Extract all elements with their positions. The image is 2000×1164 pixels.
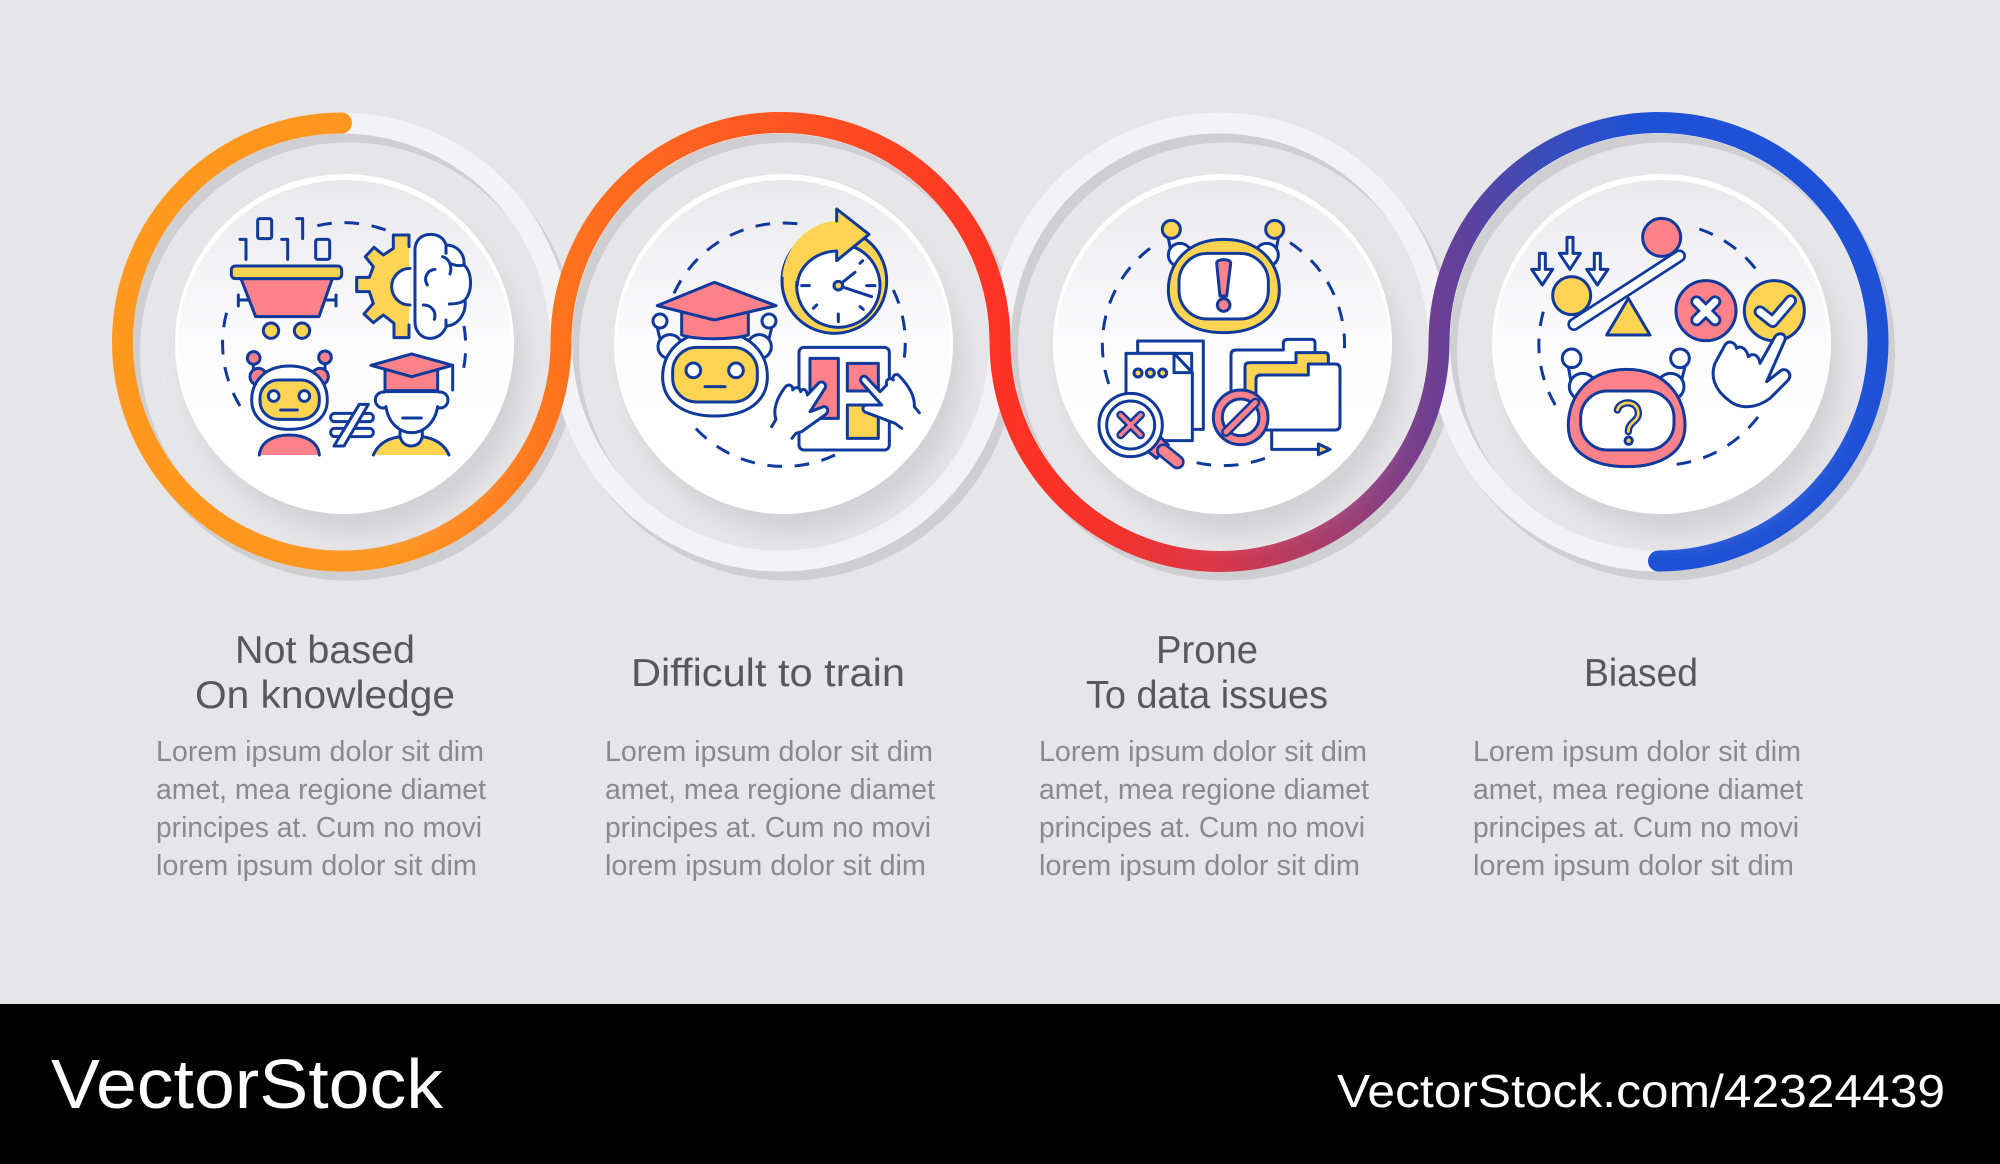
column 4 text: Biased xyxy=(1584,652,1698,695)
column 4 text: principes at. Cum no movi xyxy=(1473,812,1799,844)
column 2 text: principes at. Cum no movi xyxy=(605,812,931,844)
ring 3 base xyxy=(1000,123,1446,570)
column 4 text: amet, mea regione diamet xyxy=(1473,774,1803,806)
icon: difficult to train xyxy=(653,209,919,466)
column 2 text: Difficult to train xyxy=(631,652,905,695)
column 2 text: amet, mea regione diamet xyxy=(605,774,935,806)
icon: seesaw with balls and arrows xyxy=(1532,218,1681,335)
column 2 text xyxy=(605,652,935,882)
footer logo: VectorStock xyxy=(51,1045,444,1123)
column 3 text xyxy=(1039,629,1369,882)
column 3 text: amet, mea regione diamet xyxy=(1039,774,1369,806)
icon: not equal sign xyxy=(331,404,373,446)
disc 4 xyxy=(1492,174,1839,532)
column 2 text: Lorem ipsum dolor sit dim xyxy=(605,736,933,768)
column 1 text: principes at. Cum no movi xyxy=(156,812,482,844)
column 3 text: Lorem ipsum dolor sit dim xyxy=(1039,736,1367,768)
column 3 text: lorem ipsum dolor sit dim xyxy=(1039,850,1360,882)
column 1 text: Lorem ipsum dolor sit dim xyxy=(156,736,484,768)
icon: gear and brain xyxy=(357,234,471,338)
column 1 text: Not based xyxy=(235,629,415,672)
disc 1 xyxy=(175,174,522,532)
column 2 text: lorem ipsum dolor sit dim xyxy=(605,850,926,882)
icon: prone to data issues xyxy=(1099,220,1345,466)
column 4 text: lorem ipsum dolor sit dim xyxy=(1473,850,1794,882)
column 1 text: lorem ipsum dolor sit dim xyxy=(156,850,477,882)
icon: documents with magnifier xyxy=(1099,341,1203,462)
column 4 text: Lorem ipsum dolor sit dim xyxy=(1473,736,1801,768)
gradient serpentine progress line xyxy=(122,123,1878,562)
icon: robot xyxy=(247,351,331,455)
icon: alert robot xyxy=(1162,220,1284,333)
column 1 text xyxy=(156,629,486,882)
icon: clock with arrow xyxy=(782,209,887,333)
icon: graduate robot xyxy=(653,282,776,416)
ring 4 base xyxy=(1440,123,1884,570)
icon: question robot xyxy=(1562,349,1689,467)
column 3 text: To data issues xyxy=(1086,674,1328,717)
icon: not based on knowledge xyxy=(223,219,471,455)
icon: data cart xyxy=(231,219,342,338)
ring 1 base xyxy=(122,123,568,570)
icon: biased xyxy=(1532,218,1804,467)
footer url: VectorStock.com/42324439 xyxy=(1337,1065,1945,1117)
column 1 text: amet, mea regione diamet xyxy=(156,774,486,806)
column 4 text xyxy=(1473,652,1803,882)
footer bar xyxy=(0,1004,2000,1164)
icon: folders with prohibition sign xyxy=(1213,339,1340,455)
disc 3 xyxy=(1053,174,1400,532)
icon: tablet and hands xyxy=(772,347,919,450)
ring 2 base xyxy=(562,123,1006,570)
column 3 text: principes at. Cum no movi xyxy=(1039,812,1365,844)
icon: cross and check buttons with hand xyxy=(1676,281,1804,407)
disc 2 xyxy=(614,174,961,532)
icon: graduate xyxy=(371,354,453,455)
column 3 text: Prone xyxy=(1156,629,1258,672)
column 1 text: On knowledge xyxy=(195,674,455,717)
